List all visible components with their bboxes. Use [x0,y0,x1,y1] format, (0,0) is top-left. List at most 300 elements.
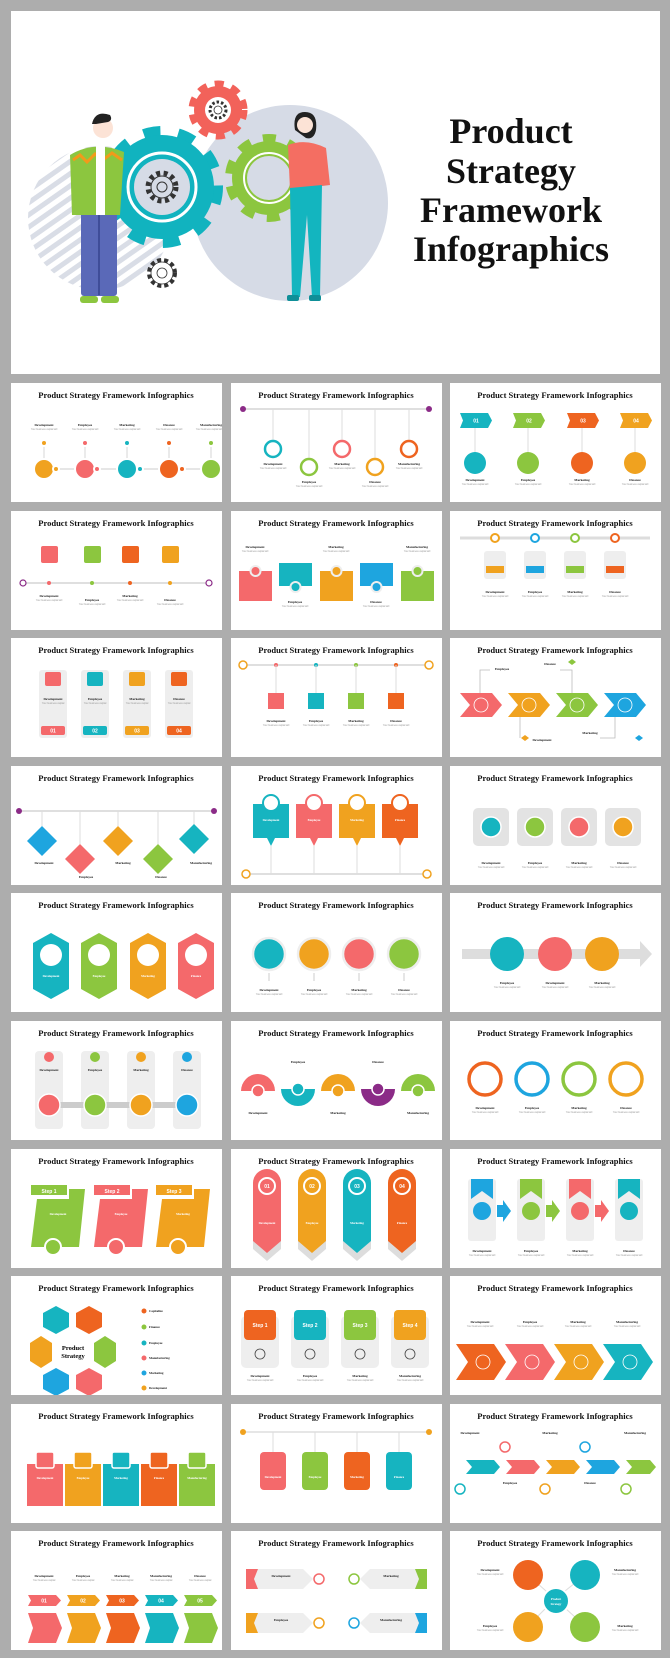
thumbnail 29: left-right arrows: Employee [274,1618,289,1622]
thumbnail 22: hexagon cluster with list: Strategy [61,1353,85,1360]
thumbnail 22: hexagon cluster with list: Development [149,1386,168,1390]
thumbnail 19: step parallelograms [11,1149,222,1268]
thumbnail 23: step cards: Step 3 [352,1323,368,1329]
thumbnail 19: step parallelograms: Step 3 [166,1189,182,1195]
thumbnail 8: line with hanging squares: Employee [309,719,324,723]
thumbnail 17: semicircle wave: Employee [291,1060,306,1064]
thumbnail 8: line with hanging squares: Finance [390,719,402,723]
thumbnail 30: circle cluster: Your business capital will [612,1629,639,1632]
thumbnail 20: capsules: Marketing [350,1221,364,1225]
thumbnail 25: colored boxes: Employee [77,1476,90,1480]
thumbnail 28: paired chevrons: Your business capital [111,1579,134,1582]
thumbnail 1: circle timeline: Your business capital will [114,428,141,431]
thumbnail 19: step parallelograms: Step 2 [104,1189,120,1195]
thumbnail 10: hanging diamonds: Finance [155,875,167,879]
thumbnail 1: circle timeline [11,383,222,502]
thumbnail 24: chevron band: Marketing [570,1320,586,1324]
thumbnail 8: line with hanging squares: Your business capital will [383,724,410,727]
thumbnail 15: arrow with circles: Your business capital will [589,986,616,989]
thumbnail 21: cards with arrows: Development [472,1249,492,1253]
thumbnail 7: tall gray cards: 04 [176,728,182,734]
thumbnail 17: semicircle wave: Marketing [330,1111,346,1115]
thumbnail 30: circle cluster: Product [551,1597,561,1601]
thumbnail 5: alternating rectangles: Development [245,545,265,549]
thumbnail 24: chevron band: Your business capital will [467,1325,494,1328]
thumbnail 11: speech boxes: Marketing [350,818,364,822]
thumbnail 3: banners with circles: Your business capital will [462,483,489,486]
thumbnail 3: banners with circles: Development [465,478,485,482]
thumbnail 20: capsules: Development [259,1221,275,1225]
thumbnail 21: cards with arrows: Marketing [572,1249,588,1253]
thumbnail 12: gray squares with circles: Employee [528,861,543,865]
thumbnail 14: circles [231,893,442,1012]
thumbnail 24: chevron band: Your business capital will [565,1325,592,1328]
thumbnail 5: alternating rectangles: Employee [288,600,303,604]
thumbnail 19: step parallelograms: Step 1 [41,1189,57,1195]
thumbnail 16: columns with arrows [11,1021,222,1140]
thumbnail 26: line with rounded rects [231,1404,442,1523]
thumbnail 18: ring circles: Your business capital will [613,1111,640,1114]
thumbnail 20: capsules [231,1149,442,1268]
thumbnail 3: banners with circles: 01 [473,418,479,424]
thumbnail 1: circle timeline: Product Strategy Framework Infographics [38,390,194,400]
thumbnail 22: hexagon cluster with list: Finance [149,1325,160,1329]
thumbnail 6: top line with cards: Finance [609,590,621,594]
thumbnail 6: top line with cards: Development [485,590,505,594]
thumbnail 18: ring circles: Finance [620,1106,632,1110]
thumbnail 15: arrow with circles [450,893,661,1012]
thumbnail 30: circle cluster: Marketing [617,1624,633,1628]
thumbnail 5: alternating rectangles: Your business capital will [404,550,431,553]
thumbnail 24: chevron band: Manufacturing [616,1320,638,1324]
thumbnail 19: step parallelograms: Development [50,1212,66,1216]
thumbnail 21: cards with arrows: Your business capital will [518,1254,545,1257]
thumbnail 15: arrow with circles: Development [545,981,565,985]
thumbnail 12: gray squares with circles: Your business capital will [566,866,593,869]
thumbnail 25: colored boxes [11,1404,222,1523]
thumbnail 22: hexagon cluster with list: Marketing [149,1371,164,1375]
thumbnail 9: chevrons with callouts [450,638,661,757]
thumbnail 27: arrow chain with circles: Manufacturing [624,1431,646,1435]
thumbnail 2: hanging rings [231,383,442,502]
thumbnail 23: step cards: Marketing [352,1374,368,1378]
thumbnail 1: circle timeline: Your business capital will [196,428,222,431]
thumbnail 7: tall gray cards: 02 [92,728,98,734]
woman [287,112,330,301]
thumbnail 14: circles: Marketing [351,988,367,992]
thumbnail 25: colored boxes: Marketing [114,1476,128,1480]
thumbnail 3: banners with circles: Your business capital will [622,483,649,486]
thumbnail 8: line with hanging squares: Your business capital will [343,724,370,727]
thumbnail 3: banners with circles: 02 [526,418,532,424]
thumbnail 10: hanging diamonds: Manufacturing [190,861,212,865]
thumbnail 7: tall gray cards: 03 [134,728,140,734]
thumbnail 28: paired chevrons: Marketing [114,1574,130,1578]
thumbnail 20: capsules: 02 [309,1184,315,1190]
thumbnail 16: columns with arrows: Finance [181,1068,193,1072]
thumbnail 3: banners with circles: Marketing [574,478,590,482]
thumbnail 11: speech boxes: Employee [308,818,321,822]
hero title: Product [449,111,573,151]
thumbnail 4: squares over line: Marketing [122,594,138,598]
thumbnail 6: top line with cards: Product Strategy Framework Infographics [477,518,633,528]
thumbnail 11: speech boxes: Finance [395,818,406,822]
thumbnail 27: arrow chain with circles [450,1404,661,1523]
thumbnail 25: colored boxes: Manufacturing [187,1476,207,1480]
thumbnail 10: hanging diamonds: Development [34,861,54,865]
thumbnail 3: banners with circles: 03 [580,418,586,424]
thumbnail 15: arrow with circles: Employee [500,981,515,985]
thumbnail 7: tall gray cards: Product Strategy Framework Infographics [38,645,194,655]
thumbnail 2: hanging rings: Your business capital will [329,467,356,470]
thumbnail 12: gray squares with circles: Marketing [571,861,587,865]
thumbnail 6: top line with cards: Your business capital will [522,595,549,598]
thumbnail 18: ring circles: Employee [525,1106,540,1110]
thumbnail 28: paired chevrons: 04 [158,1598,164,1604]
thumbnail 27: arrow chain with circles: Marketing [542,1431,558,1435]
thumbnail 30: circle cluster [450,1531,661,1650]
hero title [413,111,609,269]
thumbnail 30: circle cluster: Development [480,1568,500,1572]
thumbnail 23: step cards: Employee [303,1374,318,1378]
thumbnail 13: hexagons: Finance [191,974,202,978]
thumbnail 16: columns with arrows: Development [39,1068,59,1072]
thumbnail 2: hanging rings: Your business capital will [396,467,423,470]
thumbnail 27: arrow chain with circles: Product Strategy Framework Infographics [477,1411,633,1421]
thumbnail 10: hanging diamonds: Product Strategy Framework Infographics [38,773,194,783]
thumbnail 2: hanging rings: Marketing [334,462,350,466]
thumbnail 3: banners with circles: 04 [633,418,639,424]
thumbnail 7: tall gray cards [11,638,222,757]
thumbnail 5: alternating rectangles [231,511,442,630]
thumbnail 23: step cards [231,1276,442,1395]
thumbnail 20: capsules: Employee [306,1221,319,1225]
thumbnail 6: top line with cards: Your business capital will [602,595,629,598]
thumbnail 7: tall gray cards: Employee [88,697,103,701]
thumbnail 19: step parallelograms: Product Strategy Framework Infographics [38,1156,194,1166]
thumbnail 22: hexagon cluster with list: Product Strategy Framework Infographics [38,1283,194,1293]
gear: red top [192,84,244,136]
thumbnail 28: paired chevrons: Your business capital [72,1579,95,1582]
thumbnail 10: hanging diamonds [11,766,222,885]
thumbnail 29: left-right arrows: Development [271,1574,291,1578]
gear: green [229,138,309,218]
thumbnail 7: tall gray cards: Your business capital [126,702,149,705]
thumbnail 28: paired chevrons: Your business capital [189,1579,212,1582]
gear: teal large [106,131,218,243]
thumbnail 12: gray squares with circles: Your business capital will [610,866,637,869]
thumbnail 24: chevron band [450,1276,661,1395]
thumbnail 5: alternating rectangles: Your business capital will [323,550,350,553]
thumbnail 11: speech boxes: Development [263,818,279,822]
thumbnail 1: circle timeline: Employee [78,423,93,427]
thumbnail 10: hanging diamonds: Employee [79,875,94,879]
thumbnail 11: speech boxes [231,766,442,885]
thumbnail 29: left-right arrows: Manufacturing [380,1618,402,1622]
thumbnail 7: tall gray cards: Marketing [129,697,145,701]
thumbnail 21: cards with arrows: Your business capital will [469,1254,496,1257]
thumbnail 4: squares over line: Your business capital will [157,603,184,606]
thumbnail 2: hanging rings: Development [263,462,283,466]
thumbnail 12: gray squares with circles [450,766,661,885]
thumbnail 28: paired chevrons: Finance [194,1574,206,1578]
thumbnail 3: banners with circles: Product Strategy Framework Infographics [477,390,633,400]
thumbnail 16: columns with arrows: Product Strategy Framework Infographics [38,1028,194,1038]
thumbnail 4: squares over line: Product Strategy Framework Infographics [38,518,194,528]
man [70,114,124,303]
thumbnail 12: gray squares with circles: Development [481,861,501,865]
thumbnail 3: banners with circles: Your business capital will [569,483,596,486]
thumbnail 24: chevron band: Your business capital will [517,1325,544,1328]
hero title: Strategy [446,151,576,191]
thumbnail 22: hexagon cluster with list: Manufacturing [149,1356,170,1360]
thumbnail 18: ring circles: Your business capital will [519,1111,546,1114]
gear: small outline [149,260,175,286]
thumbnail 2: hanging rings: Your business capital will [362,485,389,488]
hero title: Infographics [413,229,609,269]
thumbnail 21: cards with arrows [450,1149,661,1268]
thumbnail 18: ring circles: Your business capital will [566,1111,593,1114]
thumbnail 20: capsules: 01 [264,1184,270,1190]
thumbnail 24: chevron band: Development [470,1320,490,1324]
thumbnail 30: circle cluster: Your business capital will [612,1573,639,1576]
thumbnail 29: left-right arrows [231,1531,442,1650]
thumbnail 5: alternating rectangles: Manufacturing [406,545,428,549]
thumbnail 13: hexagons: Employee [93,974,106,978]
thumbnail 4: squares over line: Your business capital will [79,603,106,606]
thumbnail 13: hexagons [11,893,222,1012]
thumbnail 29: left-right arrows: Marketing [383,1574,399,1578]
thumbnail 23: step cards: Step 4 [402,1323,418,1329]
thumbnail 15: arrow with circles: Marketing [594,981,610,985]
thumbnail 23: step cards: Your business capital will [247,1379,274,1382]
thumbnail 30: circle cluster: Strategy [551,1602,562,1606]
thumbnail 8: line with hanging squares: Marketing [348,719,364,723]
thumbnail 22: hexagon cluster with list [11,1276,222,1395]
thumbnail 23: step cards: Step 2 [302,1323,318,1329]
thumbnail 24: chevron band: Your business capital will [614,1325,641,1328]
thumbnail 17: semicircle wave: Manufacturing [407,1111,429,1115]
thumbnail 2: hanging rings: Finance [369,480,381,484]
thumbnail 21: cards with arrows: Finance [623,1249,635,1253]
thumbnail 12: gray squares with circles: Your business capital will [478,866,505,869]
thumbnail 5: alternating rectangles: Finance [370,600,382,604]
thumbnail 4: squares over line: Employee [85,598,100,602]
thumbnail 20: capsules: 03 [354,1184,360,1190]
thumbnail 2: hanging rings: Your business capital will [260,467,287,470]
thumbnail 5: alternating rectangles: Your business capital will [282,605,309,608]
thumbnail 14: circles: Your business capital will [301,993,328,996]
thumbnail 14: circles: Your business capital will [256,993,283,996]
thumbnail 30: circle cluster: Employee [483,1624,498,1628]
thumbnail 14: circles: Finance [398,988,410,992]
thumbnail 23: step cards: Manufacturing [399,1374,421,1378]
thumbnail 28: paired chevrons: 05 [197,1598,203,1604]
thumbnail 13: hexagons: Development [43,974,59,978]
thumbnail 18: ring circles [450,1021,661,1140]
thumbnail 23: step cards: Your business capital will [347,1379,374,1382]
thumbnail 13: hexagons: Product Strategy Framework Infographics [38,900,194,910]
thumbnail 6: top line with cards: Employee [528,590,543,594]
thumbnail 26: line with rounded rects: Product Strategy Framework Infographics [258,1411,414,1421]
thumbnail 25: colored boxes: Finance [154,1476,165,1480]
thumbnail 15: arrow with circles: Your business capital will [494,986,521,989]
thumbnail 23: step cards: Your business capital will [297,1379,324,1382]
thumbnail 1: circle timeline: Finance [163,423,175,427]
thumbnail 25: colored boxes: Development [37,1476,53,1480]
thumbnail 3: banners with circles [450,383,661,502]
thumbnail 18: ring circles: Product Strategy Framework Infographics [477,1028,633,1038]
thumbnail 28: paired chevrons: Manufacturing [150,1574,172,1578]
thumbnail 7: tall gray cards: Development [43,697,63,701]
thumbnail 27: arrow chain with circles: Development [460,1431,480,1435]
thumbnail 5: alternating rectangles: Your business capital will [363,605,390,608]
thumbnail 14: circles: Product Strategy Framework Infographics [258,900,414,910]
thumbnail 2: hanging rings: Product Strategy Framework Infographics [258,390,414,400]
thumbnail 9: chevrons with callouts: Marketing [582,731,598,735]
hero title: Framework [420,190,602,230]
thumbnail 16: columns with arrows: Marketing [133,1068,149,1072]
thumbnail 28: paired chevrons: Your business capital [150,1579,173,1582]
thumbnail 27: arrow chain with circles: Finance [584,1481,596,1485]
thumbnail 1: circle timeline: Your business capital will [72,428,99,431]
thumbnail 30: circle cluster: Your business capital will [477,1573,504,1576]
thumbnail 4: squares over line: Finance [164,598,176,602]
thumbnail 21: cards with arrows: Product Strategy Framework Infographics [477,1156,633,1166]
thumbnail 28: paired chevrons: Employee [76,1574,91,1578]
thumbnail 12: gray squares with circles: Finance [617,861,629,865]
thumbnail 28: paired chevrons: Development [34,1574,54,1578]
thumbnail 1: circle timeline: Marketing [119,423,135,427]
thumbnail 25: colored boxes: Product Strategy Framework Infographics [38,1411,194,1421]
thumbnail 23: step cards: Your business capital will [397,1379,424,1382]
thumbnail 17: semicircle wave: Development [248,1111,268,1115]
thumbnail 3: banners with circles: Employee [521,478,536,482]
thumbnail 15: arrow with circles: Your business capital will [542,986,569,989]
thumbnail 20: capsules: 04 [399,1184,405,1190]
thumbnail 10: hanging diamonds: Marketing [115,861,131,865]
thumbnail 2: hanging rings: Manufacturing [398,462,420,466]
thumbnail 26: line with rounded rects: Development [265,1475,281,1479]
thumbnail 14: circles: Development [259,988,279,992]
thumbnail 20: capsules: Product Strategy Framework Infographics [258,1156,414,1166]
thumbnail 4: squares over line [11,511,222,630]
thumbnail 26: line with rounded rects: Finance [394,1475,405,1479]
thumbnail 22: hexagon cluster with list: Employee [149,1341,163,1345]
thumbnail 28: paired chevrons: 01 [41,1598,47,1604]
thumbnail 11: speech boxes: Product Strategy Framework Infographics [258,773,414,783]
thumbnail 14: circles: Your business capital will [391,993,418,996]
thumbnail 9: chevrons with callouts: Finance [544,662,556,666]
thumbnail 26: line with rounded rects: Marketing [350,1475,364,1479]
thumbnail 28: paired chevrons: 02 [80,1598,86,1604]
thumbnail 30: circle cluster: Your business capital will [477,1629,504,1632]
thumbnail 21: cards with arrows: Your business capital will [616,1254,643,1257]
thumbnail 23: step cards: Development [250,1374,270,1378]
thumbnail 7: tall gray cards: Finance [173,697,185,701]
thumbnail 3: banners with circles: Finance [629,478,641,482]
thumbnail 27: arrow chain with circles: Employee [503,1481,518,1485]
thumbnail 13: hexagons: Marketing [141,974,155,978]
thumbnail 23: step cards: Product Strategy Framework Infographics [258,1283,414,1293]
thumbnail 7: tall gray cards: Your business capital [168,702,191,705]
thumbnail 28: paired chevrons: Your business capital [33,1579,56,1582]
thumbnail 28: paired chevrons: Product Strategy Framework Infographics [38,1538,194,1548]
thumbnail 4: squares over line: Development [39,594,59,598]
thumbnail 1: circle timeline: Development [34,423,54,427]
thumbnail 18: ring circles: Your business capital will [472,1111,499,1114]
thumbnail 6: top line with cards: Marketing [567,590,583,594]
thumbnail 4: squares over line: Your business capital will [36,599,63,602]
thumbnail 19: step parallelograms: Employee [115,1212,128,1216]
thumbnail 8: line with hanging squares: Development [266,719,286,723]
thumbnail 16: columns with arrows: Employee [88,1068,103,1072]
thumbnail 9: chevrons with callouts: Product Strategy Framework Infographics [477,645,633,655]
thumbnail 17: semicircle wave: Product Strategy Framework Infographics [258,1028,414,1038]
hero slide [11,11,660,374]
thumbnail 24: chevron band: Product Strategy Framework Infographics [477,1283,633,1293]
thumbnail 8: line with hanging squares: Your business capital will [263,724,290,727]
thumbnail 30: circle cluster: Manufacturing [614,1568,636,1572]
thumbnail 12: gray squares with circles: Product Strategy Framework Infographics [477,773,633,783]
thumbnail 5: alternating rectangles: Your business capital will [242,550,269,553]
thumbnail 1: circle timeline: Manufacturing [200,423,222,427]
thumbnail 17: semicircle wave [231,1021,442,1140]
thumbnail 22: hexagon cluster with list: Capitalize [149,1309,163,1313]
thumbnail 9: chevrons with callouts: Employee [495,667,510,671]
thumbnail 9: chevrons with callouts: Development [532,738,552,742]
thumbnail 8: line with hanging squares [231,638,442,757]
thumbnail 6: top line with cards [450,511,661,630]
thumbnail 14: circles: Your business capital will [346,993,373,996]
thumbnail 26: line with rounded rects: Employee [309,1475,322,1479]
thumbnail 2: hanging rings: Your business capital will [296,485,323,488]
thumbnail 18: ring circles: Development [475,1106,495,1110]
thumbnail 19: step parallelograms: Marketing [176,1212,190,1216]
thumbnail 28: paired chevrons: 03 [119,1598,125,1604]
thumbnail 29: left-right arrows: Product Strategy Framework Infographics [258,1538,414,1548]
thumbnail 3: banners with circles: Your business capital will [515,483,542,486]
thumbnail 7: tall gray cards: Your business capital [84,702,107,705]
thumbnail 20: capsules: Finance [397,1221,408,1225]
thumbnail 1: circle timeline: Your business capital will [31,428,58,431]
illustration: people with gears [28,84,388,303]
thumbnail 23: step cards: Step 1 [252,1323,268,1329]
thumbnail 17: semicircle wave: Finance [372,1060,384,1064]
thumbnail 21: cards with arrows: Employee [524,1249,539,1253]
thumbnail 7: tall gray cards: Your business capital [42,702,65,705]
thumbnail 15: arrow with circles: Product Strategy Framework Infographics [477,900,633,910]
thumbnail 14: circles: Employee [307,988,322,992]
thumbnail 6: top line with cards: Your business capital will [562,595,589,598]
thumbnail 12: gray squares with circles: Your business capital will [522,866,549,869]
thumbnail 30: circle cluster: Product Strategy Framework Infographics [477,1538,633,1548]
thumbnail 5: alternating rectangles: Marketing [328,545,344,549]
thumbnail 21: cards with arrows: Your business capital will [567,1254,594,1257]
thumbnail 28: paired chevrons [11,1531,222,1650]
thumbnail 8: line with hanging squares: Your business capital will [303,724,330,727]
thumbnail 22: hexagon cluster with list: Product [62,1345,85,1352]
thumbnail 6: top line with cards: Your business capital will [482,595,509,598]
thumbnail 24: chevron band: Employee [523,1320,538,1324]
thumbnail 18: ring circles: Marketing [571,1106,587,1110]
thumbnail 4: squares over line: Your business capital will [117,599,144,602]
thumbnail 1: circle timeline: Your business capital will [156,428,183,431]
thumbnail 5: alternating rectangles: Product Strategy Framework Infographics [258,518,414,528]
thumbnail 7: tall gray cards: 01 [50,728,56,734]
thumbnail 8: line with hanging squares: Product Strategy Framework Infographics [258,645,414,655]
thumbnail 2: hanging rings: Employee [302,480,317,484]
